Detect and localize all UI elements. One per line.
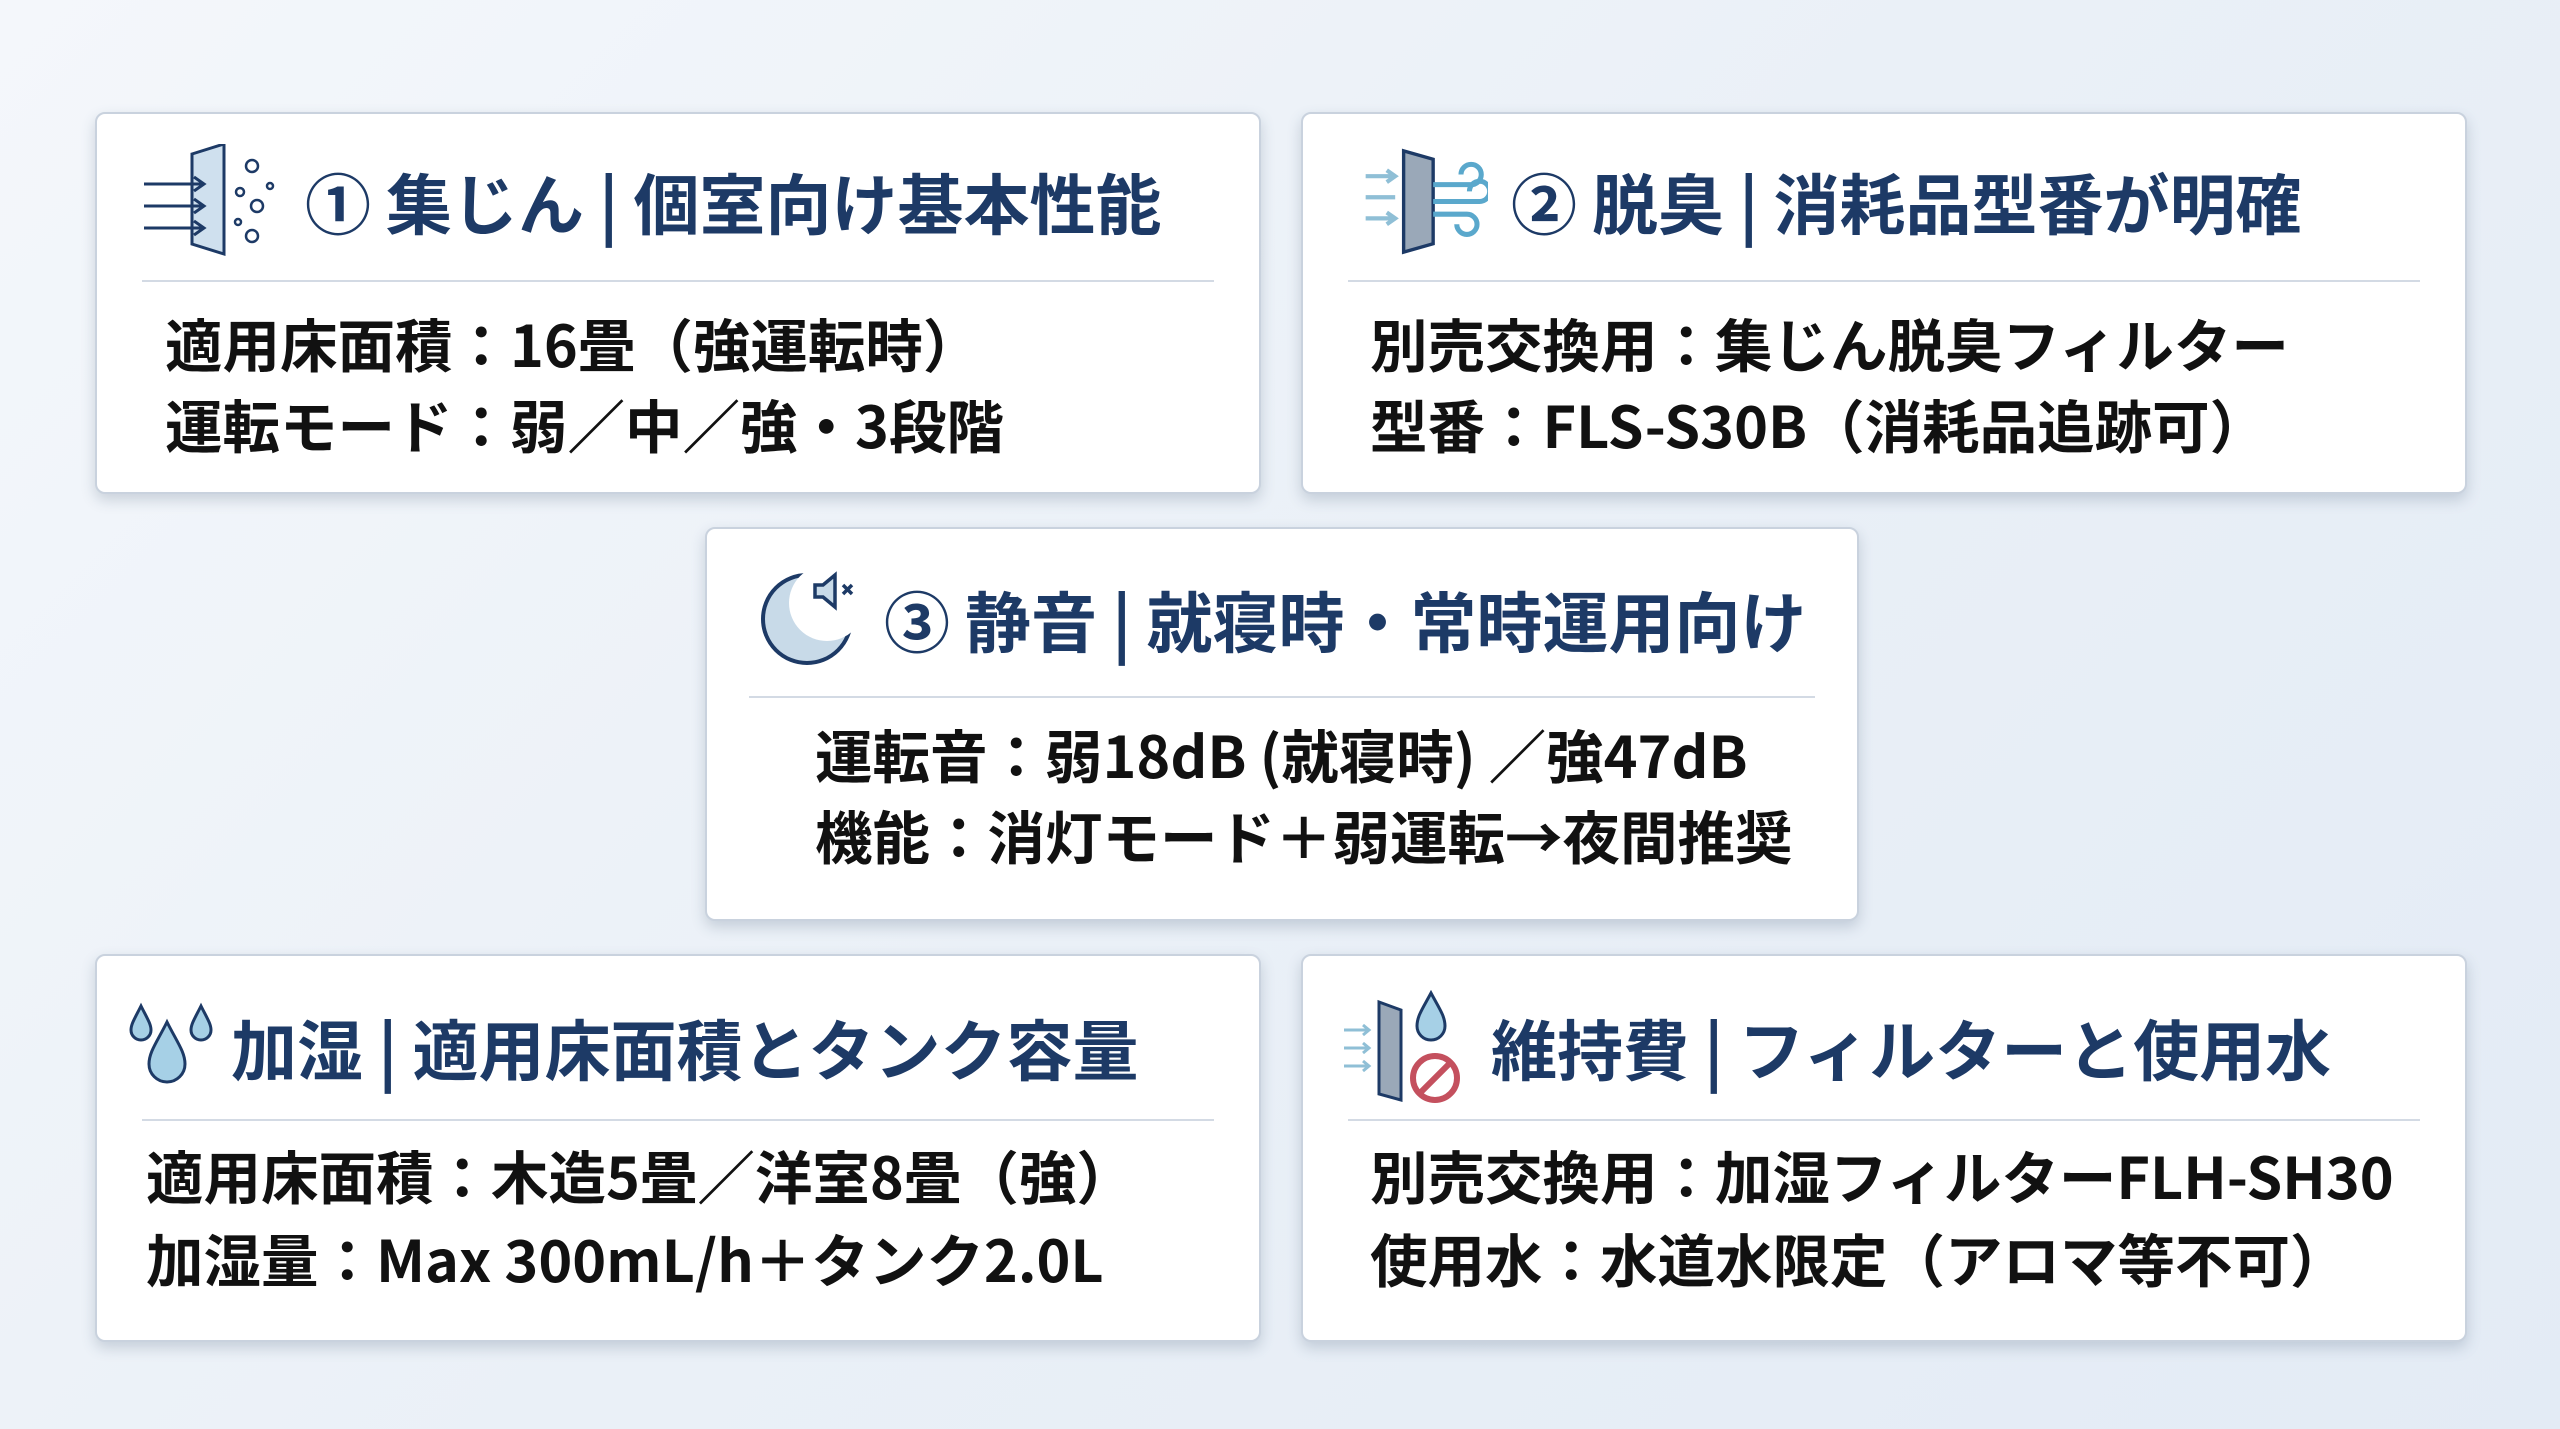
body text: 別売交換用：加湿フィルターFLH-SH30 (1370, 1132, 2394, 1216)
heading: ② 脱臭 | 消耗品型番が明確 (1511, 153, 2301, 249)
panel: humidification (95, 954, 1261, 1342)
icon: water drops (130, 1002, 212, 1084)
body text (815, 711, 1792, 876)
heading: 加湿 | 適用床面積とタンク容量 (231, 999, 1138, 1095)
body text: 適用床面積：16畳（強運転時） (165, 300, 980, 384)
icon: filter with particles (144, 144, 274, 256)
icon: filter, drop and prohibition (1344, 990, 1460, 1103)
icon: filter with wind (1366, 148, 1488, 254)
heading: 維持費 | フィルターと使用水 (1491, 999, 2331, 1095)
body text: 加湿量：Max 300mL/h＋タンク2.0L (146, 1215, 1104, 1299)
body text: 運転モード：弱／中／強・3段階 (165, 381, 1004, 465)
panel: quiet (705, 527, 1859, 921)
body text: 別売交換用：集じん脱臭フィルター (1370, 300, 2289, 384)
panel: dust collection (95, 112, 1261, 494)
body text: 運転音：弱18dB (就寝時) ／強47dB (815, 711, 1748, 795)
icon: moon and mute speaker (761, 571, 854, 665)
panel: maintenance cost (1301, 954, 2467, 1342)
heading: ① 集じん | 個室向け基本性能 (305, 153, 1161, 249)
body text (1370, 1132, 2394, 1299)
body text: 機能：消灯モード＋弱運転→夜間推奨 (815, 792, 1792, 876)
panel: deodorization (1301, 112, 2467, 494)
body text: 型番：FLS-S30B（消耗品追跡可） (1370, 381, 2267, 465)
body text (165, 300, 1004, 465)
body text: 適用床面積：木造5畳／洋室8畳（強） (146, 1132, 1134, 1216)
heading: ③ 静音 | 就寝時・常時運用向け (884, 571, 1806, 667)
body text (1370, 300, 2289, 465)
body text (146, 1132, 1134, 1299)
body text: 使用水：水道水限定（アロマ等不可） (1370, 1215, 2348, 1299)
